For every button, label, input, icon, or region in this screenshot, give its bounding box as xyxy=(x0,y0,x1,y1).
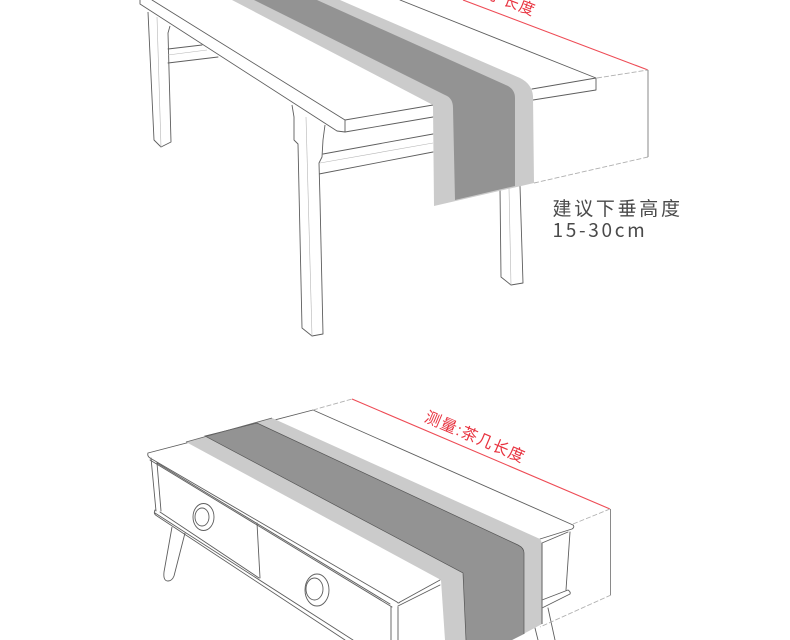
table runner xyxy=(232,0,534,206)
coffee table runner xyxy=(186,418,542,640)
front left table leg xyxy=(292,105,325,336)
red measure line: table length xyxy=(463,0,648,70)
table top xyxy=(140,0,596,132)
label: coffee table length: 测量:茶几长度 xyxy=(422,408,528,467)
drawer knob right xyxy=(305,574,329,606)
red measure line: coffee table length xyxy=(352,399,610,509)
drop height guide xyxy=(534,70,648,183)
coffee table body front xyxy=(151,458,398,640)
back left table leg xyxy=(148,12,171,147)
coffee table legs xyxy=(164,527,555,640)
label: recommended drop height: 15-30cm xyxy=(552,216,647,243)
front right table leg xyxy=(500,186,523,285)
label: recommended drop height: 建议下垂高度 xyxy=(552,198,683,220)
front stretchers xyxy=(319,134,433,174)
coffee table illustration xyxy=(148,399,611,640)
dining table illustration xyxy=(140,0,683,336)
label: recommended drop height xyxy=(552,198,683,243)
coffee table top xyxy=(148,410,574,607)
back stretchers xyxy=(168,45,218,63)
drawer knob left xyxy=(193,504,214,530)
coffee table guide lines xyxy=(313,399,611,627)
coffee table body side xyxy=(542,532,570,608)
